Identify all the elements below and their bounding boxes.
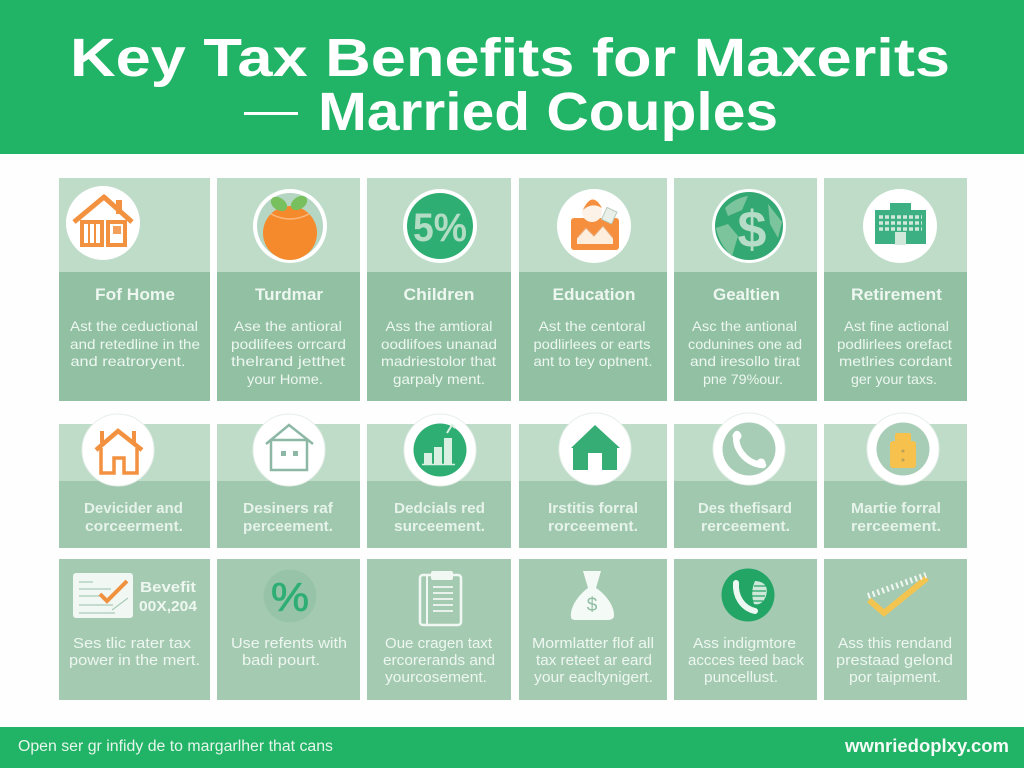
body text (70, 318, 200, 369)
body text: podlirlees or earts (534, 336, 650, 352)
text (698, 500, 792, 535)
body text: ger your taxs. (851, 371, 937, 387)
body text: Ass the amtioral (386, 318, 492, 334)
body text: tax reteet ar eard (536, 653, 652, 669)
body text: Use refents with (231, 636, 347, 652)
body text (381, 318, 497, 387)
icon: orange fruit (253, 189, 327, 263)
icon: 5 percent badge: 5% (413, 206, 467, 250)
icon: money bag (571, 571, 614, 620)
text (548, 500, 638, 535)
icon: grey house (253, 414, 325, 486)
body text: thelrand jetthet (231, 353, 345, 369)
heading: Gealtien (713, 286, 780, 304)
icon: building (863, 189, 937, 263)
panel: Irstitis (519, 413, 667, 548)
text (394, 500, 485, 535)
panel: Martie forral (824, 413, 967, 548)
text: Irstitis forral (548, 500, 638, 517)
body text (534, 318, 652, 369)
text: Desiners raf (243, 500, 334, 517)
text: corceerment. (85, 518, 183, 535)
heading: Fof Home (95, 286, 175, 304)
benefit figure (139, 580, 197, 615)
body text (383, 636, 495, 686)
panel: Turdmar (217, 178, 360, 401)
title line 2: Married Couples (318, 82, 778, 142)
text: surceement. (394, 518, 485, 535)
footer url: wwnriedoplxy.com (844, 735, 1009, 756)
body text: Ast fine actional (844, 318, 949, 334)
panel: Des thefisard (674, 413, 817, 548)
panel: clipboard (367, 559, 511, 700)
icon: orange house (66, 186, 140, 260)
panel: ruler (824, 559, 967, 700)
panel: Children (367, 178, 511, 401)
heading: Education (552, 286, 636, 304)
text (84, 500, 183, 535)
body text (688, 636, 805, 686)
panel: Retirement (824, 178, 967, 401)
panel: percent (217, 559, 360, 700)
title line 1: Key Tax Benefits for Maxerits (70, 28, 950, 88)
body text: your Home. (247, 371, 323, 387)
body text: Mormlatter flof all (532, 636, 654, 652)
benefit figure: 00X,204 (139, 599, 197, 615)
body text: Ass this rendand (838, 636, 952, 652)
icon: yellow bottle (867, 413, 939, 485)
icon: teacher (557, 189, 631, 263)
body text: puncellust. (704, 670, 778, 686)
body text: power in the mert. (69, 653, 200, 669)
body text: garpaly ment. (393, 371, 485, 387)
text: Dedcials red (394, 500, 485, 517)
panel: money bag (519, 559, 667, 700)
body text (837, 318, 952, 387)
text: rerceement. (851, 518, 941, 535)
text: Des thefisard (698, 500, 792, 517)
body text (836, 636, 953, 686)
text: perceement. (243, 518, 333, 535)
icon: clipboard (420, 571, 461, 625)
body text: metlries cordant (839, 353, 952, 369)
icon: outlined orange house (82, 414, 154, 486)
body text: pne 79%our. (703, 371, 783, 387)
text: rorceement. (548, 518, 638, 535)
heading: Retirement (851, 286, 943, 304)
body text: por taipment. (849, 670, 941, 686)
body text: Ass indigmtore (693, 636, 796, 652)
icon: 5 percent badge (403, 189, 477, 263)
icon: money bag: $ (587, 595, 598, 616)
heading: Children (404, 286, 474, 304)
text (243, 500, 334, 535)
panel: phone badge (674, 559, 817, 700)
body text: accces teed back (688, 653, 805, 669)
body text: Oue cragen taxt (385, 636, 492, 652)
icon: yellow ruler check (868, 575, 927, 613)
icon: percent: % (271, 576, 309, 620)
icon: phone badge (722, 568, 774, 622)
body text: Ses tlic rater tax (73, 636, 192, 652)
body text (532, 636, 654, 686)
body text: and retedline in the (70, 336, 200, 352)
panel: Dedcials (367, 414, 511, 548)
panel: For Home (59, 178, 210, 401)
body text: yourcosement. (385, 670, 487, 686)
heading: Turdmar (255, 286, 324, 304)
footer note: Open ser gr infidy de to margarlher that cans (18, 738, 333, 755)
footer banner (0, 727, 1024, 768)
panel: Benefit card (59, 559, 210, 700)
body text: ant to tey optnent. (534, 353, 652, 369)
body text: Ast the centoral (538, 318, 646, 334)
body text (231, 636, 347, 669)
body text: your eacltynigert. (534, 670, 653, 686)
body text: Ast the ceductional (70, 318, 198, 334)
panel: Education (519, 178, 667, 401)
icon: globe with dollar: $ (738, 201, 767, 259)
body text (688, 318, 802, 387)
text: Martie forral (851, 500, 941, 517)
body text: and reatroryent. (70, 353, 186, 369)
body text: badi pourt. (242, 653, 320, 669)
icon: globe with dollar (712, 189, 786, 263)
body text: Asc the antional (692, 318, 797, 334)
text: rerceement. (701, 518, 790, 535)
icon: bar chart badge (404, 414, 476, 486)
icon: phone (713, 413, 785, 485)
panel: Gealtien (674, 178, 817, 401)
body text: ercorerands and (383, 653, 495, 669)
icon: percent (264, 570, 316, 622)
body text (69, 636, 200, 669)
body text: podlifees orrcard (231, 336, 346, 352)
body text: codunines one ad (688, 336, 802, 352)
body text (231, 318, 346, 387)
benefit figure: Bevefit (140, 580, 196, 596)
body text: podlirlees orefact (837, 336, 952, 352)
panel: Devicider (59, 414, 210, 548)
body text: madriestolor that (381, 353, 496, 369)
text (851, 500, 941, 535)
body text: oodlifoes unanad (381, 336, 497, 352)
body text: and iresollo tirat (690, 353, 800, 369)
text: Devicider and (84, 500, 183, 517)
body text: prestaad gelond (836, 653, 953, 669)
body text: Ase the antioral (234, 318, 342, 334)
header banner (0, 0, 1024, 154)
icon: checklist card (73, 573, 133, 618)
icon: green house (559, 413, 631, 485)
panel: Desiners (217, 414, 360, 548)
